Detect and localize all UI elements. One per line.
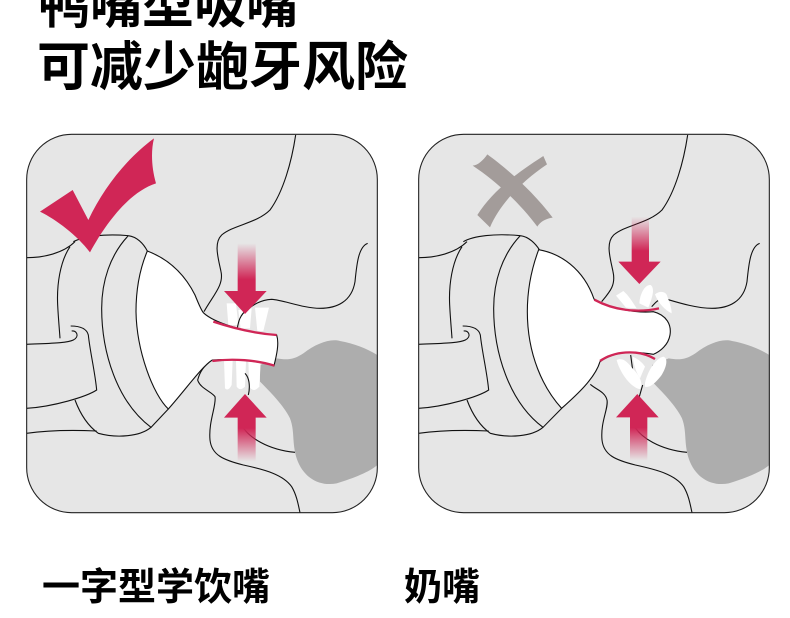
tongue shape	[652, 340, 769, 484]
panel: correct duckbill spout	[27, 134, 377, 513]
bottle collar outlines	[27, 235, 168, 436]
label: duckbill spout: 一字型学饮嘴	[42, 567, 270, 609]
panel: regular teat	[419, 134, 769, 513]
spout	[136, 251, 278, 409]
spout compression lines	[212, 322, 277, 366]
arrow up	[224, 394, 267, 462]
tongue shape	[260, 340, 377, 484]
arrow up	[616, 394, 659, 461]
teeth	[224, 303, 269, 390]
cross mark	[473, 154, 553, 227]
face outlines	[590, 135, 760, 513]
teat compression lines	[594, 300, 659, 361]
arrow down	[618, 217, 661, 284]
heading line 2: 可减少龅牙风险	[37, 38, 408, 97]
face outlines	[198, 135, 368, 513]
teeth	[616, 285, 672, 389]
label: teat: 奶嘴	[404, 567, 480, 609]
teat	[527, 250, 670, 408]
check mark	[40, 138, 156, 252]
bottle collar outlines	[419, 235, 562, 436]
arrow down	[224, 243, 267, 314]
